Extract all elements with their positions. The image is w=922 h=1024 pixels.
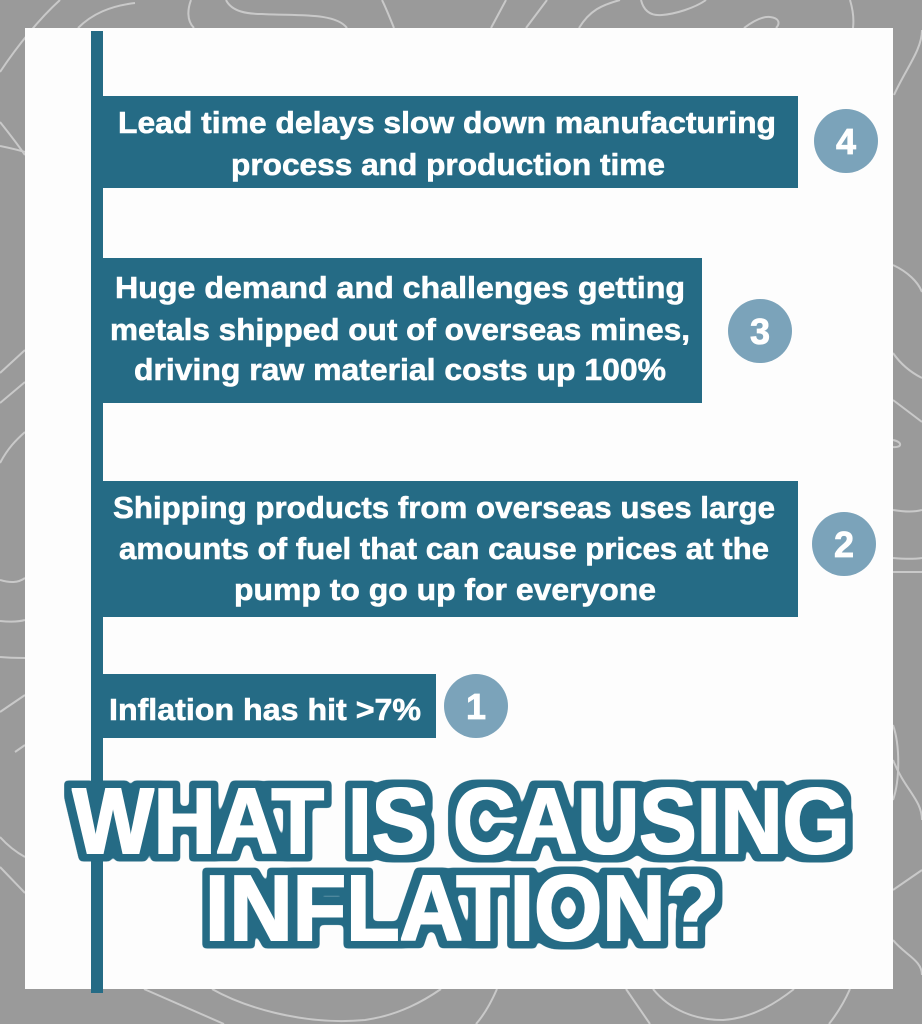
icon: number 3: 3: [750, 311, 770, 352]
panel: item 2: pump to go up for everyone: [234, 572, 656, 607]
panel: item 1: Inflation has hit >7%: [109, 692, 421, 727]
panel: item 2: Shipping products from overseas uses large: [113, 490, 775, 525]
icon: number 2: [812, 512, 876, 576]
panel: item 4: process and production time: [231, 147, 665, 182]
icon: number 1: 1: [466, 686, 486, 727]
icon: number 4: [814, 109, 878, 173]
panel: item 3: metals shipped out of overseas mines,: [110, 312, 690, 347]
icon: number 3: [728, 299, 792, 363]
panel: item 3: Huge demand and challenges getting: [115, 270, 685, 305]
panel: item 4: [103, 96, 798, 188]
panel: item 4: Lead time delays slow down manufacturing: [118, 105, 776, 140]
panel: item 2: [103, 481, 798, 617]
panel: item 1: [103, 674, 436, 738]
icon: number 2: 2: [834, 524, 854, 565]
icon: number 1: [444, 674, 508, 738]
panel: item 3: [103, 258, 702, 403]
timeline bar: [91, 31, 103, 993]
icon: number 4: 4: [836, 121, 856, 162]
panel: item 2: amounts of fuel that can cause prices at the: [119, 531, 769, 566]
title: INFLATION?: [205, 856, 719, 960]
panel: item 3: driving raw material costs up 100%: [134, 352, 666, 387]
title: [72, 769, 850, 960]
title: WHAT IS CAUSING: [72, 769, 850, 873]
